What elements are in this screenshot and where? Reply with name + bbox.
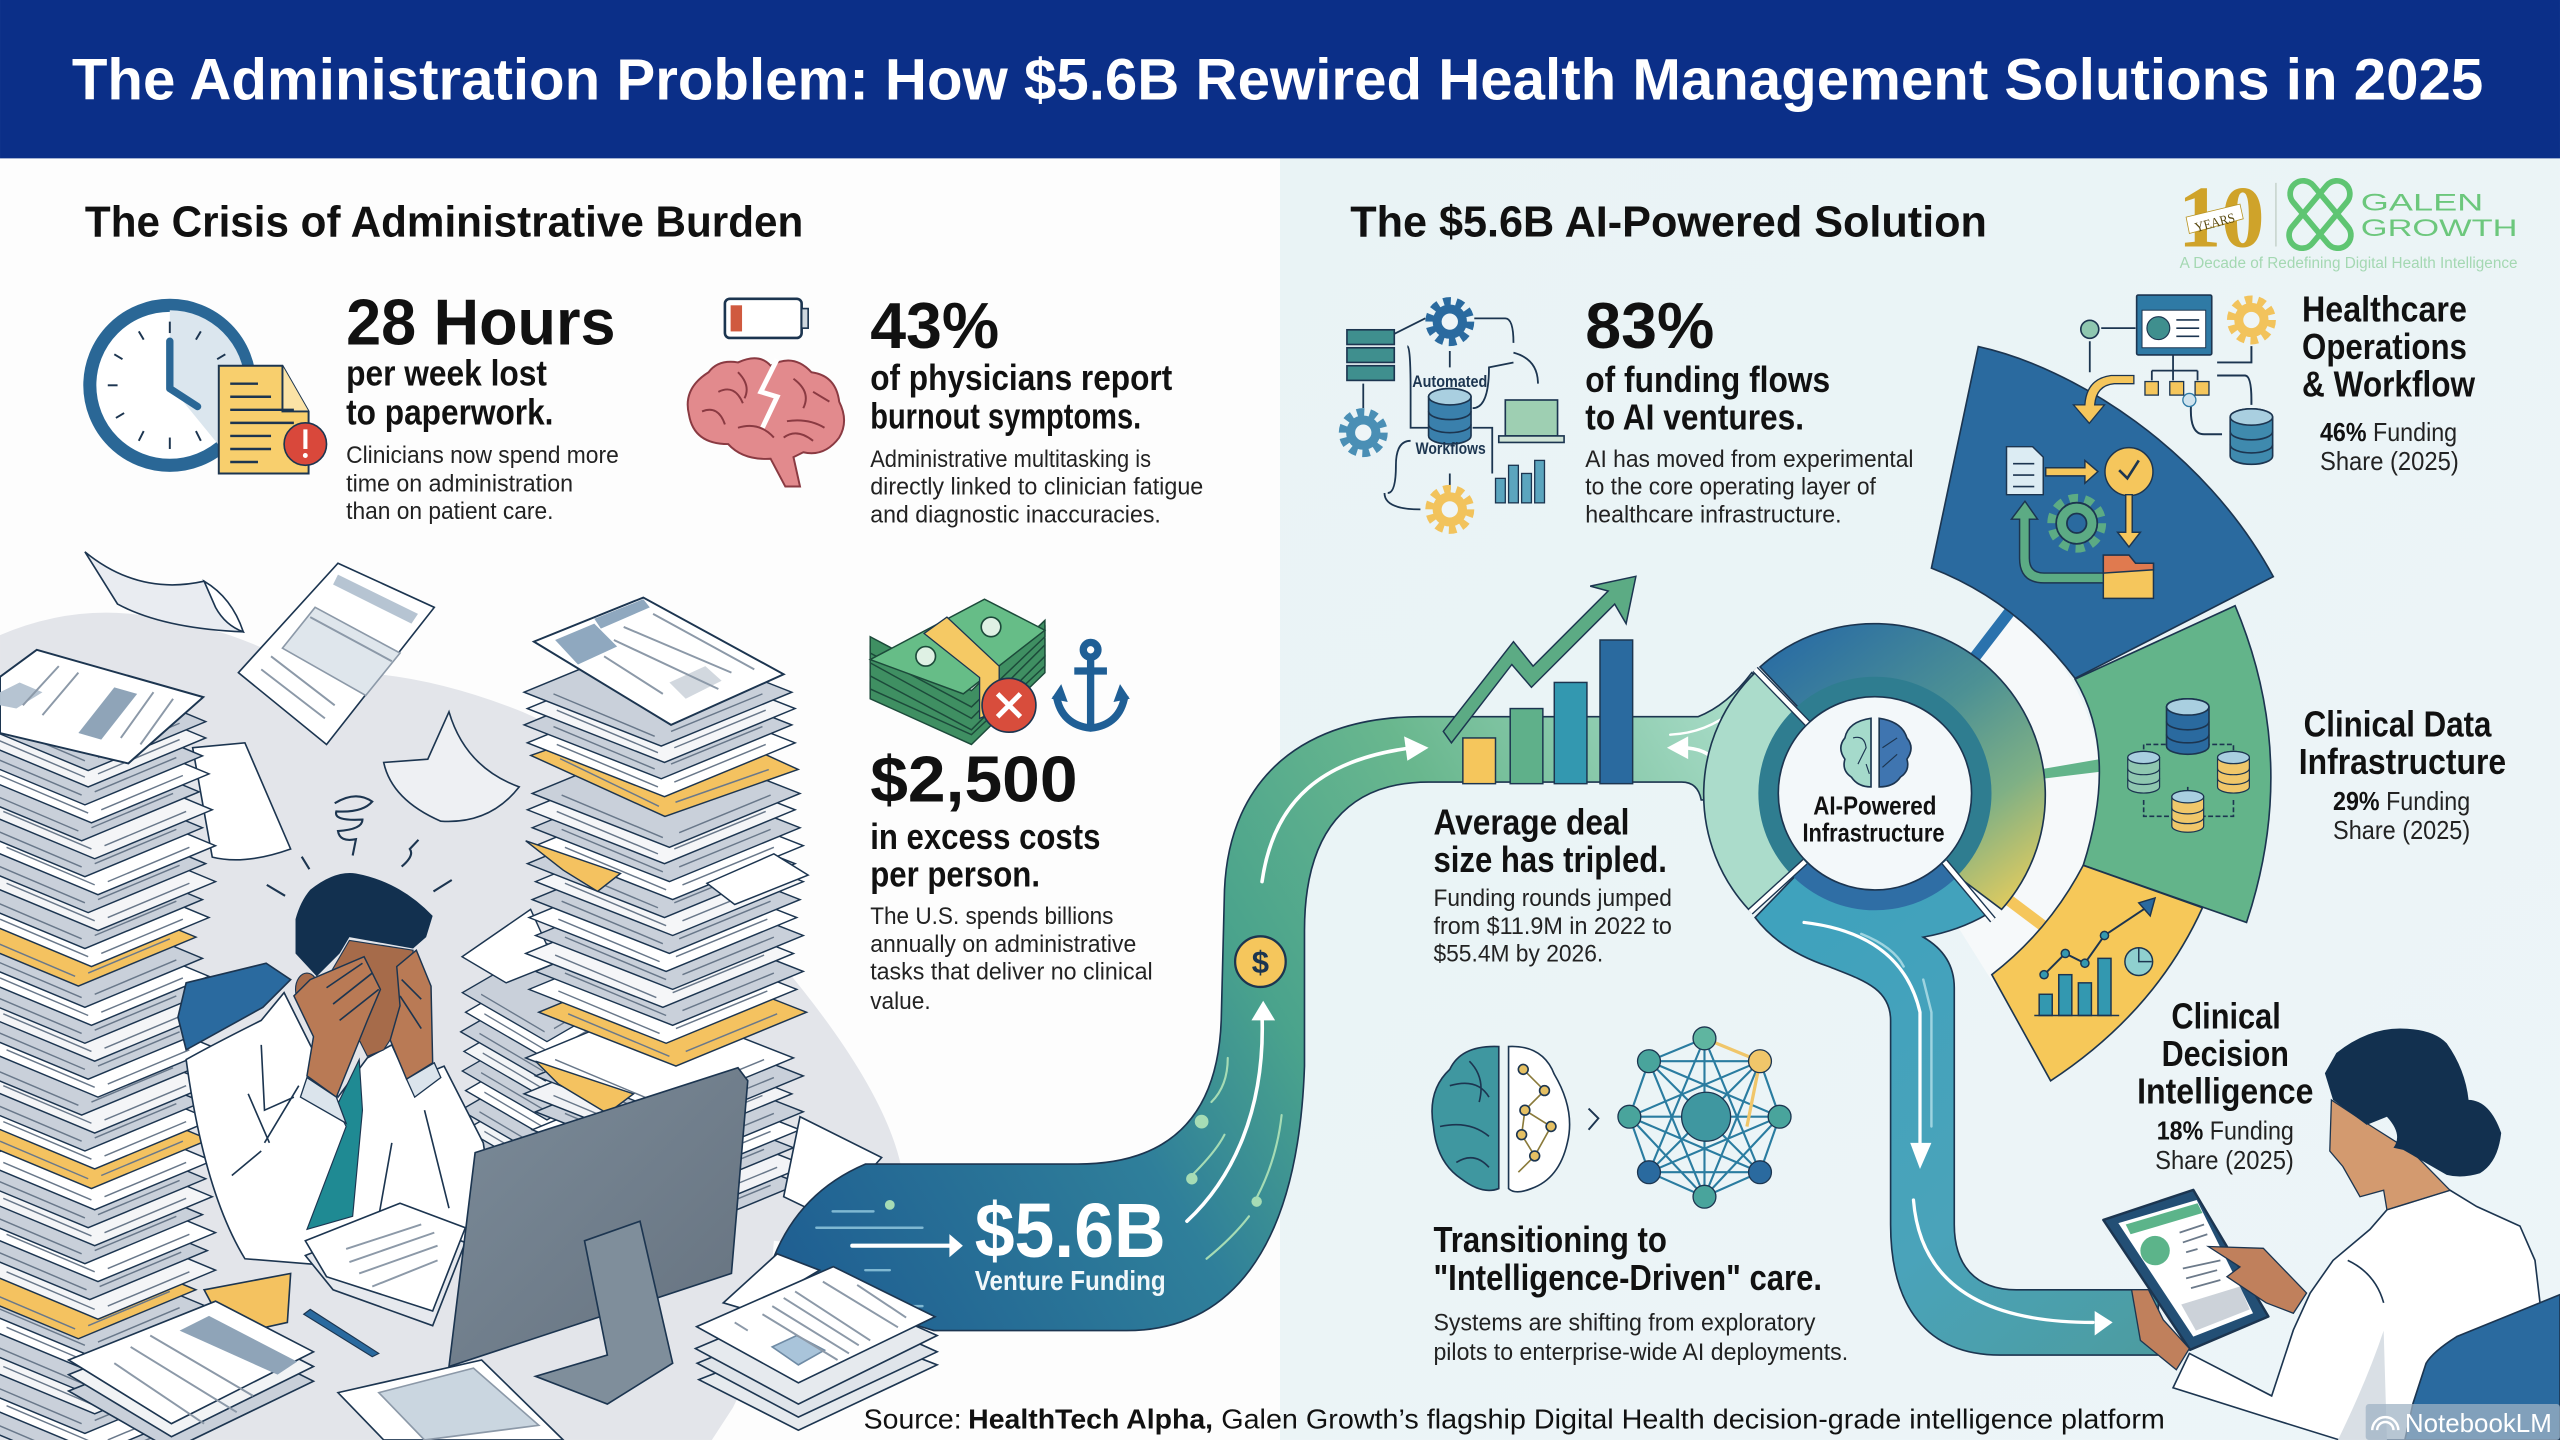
wedge: clinical decision intelligence <box>1992 865 2202 1081</box>
text: clinical decision intelligence: 18% Funding <box>2157 1116 2294 1146</box>
desk papers: front <box>69 1273 313 1450</box>
wedge: healthcare operations <box>1931 347 2273 678</box>
stat: $2,500: $2,500 <box>870 744 1078 816</box>
inner band <box>1768 687 1982 900</box>
icon: workflow automation: Automated <box>1412 373 1487 391</box>
neck and face <box>2330 1100 2450 1210</box>
cuffs <box>300 1063 441 1123</box>
icon: analytics chart <box>2034 898 2155 1015</box>
icon: green cross <box>2284 175 2356 254</box>
NotebookLM badge <box>2366 1404 2560 1440</box>
stat: $2,500: in excess costs <box>870 816 1100 857</box>
funding label: $5.6B <box>975 1189 1166 1274</box>
stat: $2,500: per person. <box>870 854 1040 895</box>
back stack <box>461 909 636 1277</box>
growth arrow <box>1443 576 1636 743</box>
source line: Galen Growth’s flagship Digital Health decision-grade intelligence platform <box>1221 1404 2165 1435</box>
text: average deal size: Funding rounds jumped <box>1433 885 1672 912</box>
text: clinical data infrastructure <box>2299 703 2506 845</box>
stat: 43%: Administrative multitasking is <box>870 446 1151 473</box>
wordmark <box>2361 191 2518 242</box>
icon: workflow automation: Workflows <box>1416 440 1486 458</box>
teal output channel <box>1755 865 2158 1355</box>
stat: 28 hours: 28 Hours <box>346 286 616 358</box>
stat: 28 hours: Clinicians now spend more <box>346 442 619 469</box>
stat: 83%: to AI ventures. <box>1585 396 1804 437</box>
grey backdrop <box>0 613 903 1440</box>
connector stems <box>1959 607 2109 939</box>
hub separators <box>1750 669 1993 920</box>
left heading: The Crisis of Administrative Burden <box>85 199 803 247</box>
centre disc <box>1778 697 1972 890</box>
network <box>1618 1027 1791 1208</box>
wordmark: GROWTH <box>2361 216 2518 242</box>
desk papers: left <box>305 1203 465 1326</box>
hub ring: AI-powered infrastructure <box>1704 624 2045 920</box>
coat fold <box>2348 1260 2384 1303</box>
text: clinical decision intelligence: Decision <box>2162 1033 2289 1074</box>
icon: AI brain <box>1841 718 1911 787</box>
text: average deal size: size has tripled. <box>1433 839 1667 880</box>
coat <box>2173 1190 2540 1440</box>
stat: 43%: burnout symptoms. <box>870 396 1141 437</box>
text: clinical data infrastructure: Infrastructure <box>2299 741 2506 782</box>
chair <box>178 963 291 1050</box>
coat folds <box>232 1045 449 1216</box>
hands <box>294 950 433 1097</box>
stat: 28 hours: per week lost <box>346 352 547 393</box>
clinician <box>69 873 882 1450</box>
coin <box>1235 936 1286 987</box>
text: intelligence-driven care: pilots to enterprise-wide AI deployments. <box>1433 1339 1848 1366</box>
stress spiral <box>267 796 452 896</box>
logo: Galen Growth <box>2178 169 2518 272</box>
stat: 43%: of physicians report <box>870 357 1172 398</box>
stat: 43% <box>870 290 1203 528</box>
source line: HealthTech Alpha, <box>968 1404 1213 1435</box>
stat: $2,500: tasks that deliver no clinical <box>870 959 1153 986</box>
stat: 43%: 43% <box>870 290 999 362</box>
stat: 28 hours: to paperwork. <box>346 391 553 432</box>
text: clinical data infrastructure: Clinical Data <box>2304 703 2492 744</box>
stat: $2,500: value. <box>870 988 931 1015</box>
illustration: clinician with tablet <box>2103 1029 2560 1440</box>
10 years mark: YEARS <box>2193 211 2237 236</box>
tie <box>307 1060 362 1229</box>
text: average deal size: Average deal <box>1433 801 1629 842</box>
title banner <box>0 0 2560 158</box>
icon: low battery and cracked brain <box>688 299 844 487</box>
hair <box>2325 1029 2501 1176</box>
text: average deal size: $55.4M by 2026. <box>1433 941 1603 968</box>
white channel between hub and wedges <box>1874 614 2101 986</box>
flow arrows <box>816 710 1742 1306</box>
text: clinical decision intelligence: Intelligence <box>2137 1071 2313 1112</box>
pale inflow arc <box>1704 673 1807 909</box>
funding flow ribbon <box>774 673 1812 1331</box>
monitor <box>449 1068 748 1404</box>
stat: 83%: to the core operating layer of <box>1585 474 1876 501</box>
hub label: Infrastructure <box>1802 818 1944 848</box>
stat: 28 hours <box>346 286 619 525</box>
stat: 83%: 83% <box>1585 290 1714 362</box>
text: intelligence-driven care: Systems are shifting from exploratory <box>1433 1310 1816 1337</box>
text: clinical decision intelligence <box>2137 996 2313 1175</box>
text: clinical data infrastructure: Share (2025) <box>2333 815 2470 845</box>
text: intelligence-driven care: "Intelligence-Driven" care. <box>1433 1257 1822 1298</box>
left stack top sheet <box>0 650 203 763</box>
text: clinical decision intelligence: Clinical <box>2171 996 2281 1037</box>
right heading: The $5.6B AI-Powered Solution <box>1350 199 1987 247</box>
stat: 28 hours: time on administration <box>346 470 573 497</box>
text: intelligence-driven care: Transitioning to <box>1433 1219 1667 1260</box>
text: clinical data infrastructure: 29% Funding <box>2333 786 2470 816</box>
desk papers: centre <box>338 1360 563 1440</box>
icon: brain to network <box>1432 1027 1791 1208</box>
chair <box>2405 1295 2560 1440</box>
wordmark: GALEN <box>2361 191 2483 217</box>
left paper stack <box>0 673 216 1455</box>
stat: $2,500 <box>870 744 1153 1015</box>
ear <box>296 973 318 1006</box>
desk papers: right stack <box>696 1254 937 1430</box>
stat: 43%: and diagnostic inaccuracies. <box>870 501 1161 528</box>
icon: clock and document <box>90 305 327 473</box>
wedge: clinical data infrastructure <box>2075 606 2271 922</box>
inner band bottom arc <box>1801 870 1949 900</box>
sheet behind monitor <box>784 1117 882 1218</box>
stat: 83%: of funding flows <box>1585 359 1830 400</box>
icon: workflow loop <box>2007 447 2153 598</box>
main gradient arc <box>1760 624 2045 909</box>
icon: workflow automation <box>1343 301 1564 530</box>
text: average deal size <box>1433 801 1672 968</box>
floating paper: curled <box>85 552 243 632</box>
pen <box>304 1309 379 1357</box>
hands <box>2132 1247 2307 1370</box>
stat: 83%: AI has moved from experimental <box>1585 446 1913 473</box>
loose white sheet <box>193 743 291 860</box>
stat: $2,500: annually on administrative <box>870 931 1136 958</box>
text: healthcare operations: Operations <box>2302 326 2467 367</box>
source line: Source: <box>864 1404 962 1435</box>
right paper stack <box>524 638 808 1238</box>
NotebookLM badge: NotebookLM <box>2405 1408 2552 1438</box>
text: intelligence-driven care <box>1433 1219 1848 1366</box>
right stack top sheet <box>534 598 784 725</box>
icon: databases <box>2128 699 2249 832</box>
coin: $ <box>1252 945 1269 980</box>
stat: 83%: healthcare infrastructure. <box>1585 501 1842 528</box>
icon: money stack with red X and anchor <box>870 599 1130 744</box>
text: healthcare operations: Share (2025) <box>2320 446 2459 476</box>
text: healthcare operations <box>2302 289 2475 476</box>
10 years mark: 10 <box>2178 169 2264 267</box>
coat <box>186 993 498 1265</box>
tagline: A Decade of Redefining Digital Health Intelligence <box>2180 255 2518 272</box>
bar chart: deal size growth <box>1443 576 1636 784</box>
hair <box>296 873 433 976</box>
text: clinical decision intelligence: Share (2025) <box>2155 1145 2294 1175</box>
brain <box>1432 1046 1570 1192</box>
channel arrows <box>1804 922 2093 1322</box>
crumpled paper <box>384 712 519 821</box>
coat shadow <box>2338 1331 2387 1440</box>
tablet <box>2103 1190 2268 1350</box>
text: healthcare operations: & Workflow <box>2302 364 2475 405</box>
icon: operations dashboard above wedge <box>2073 295 2273 464</box>
hub label: AI-Powered <box>1813 791 1936 821</box>
text: healthcare operations: 46% Funding <box>2320 417 2457 447</box>
text: healthcare operations: Healthcare <box>2302 289 2467 330</box>
flow dots <box>885 1115 1262 1210</box>
title banner: The Administration Problem: How $5.6B Rewired Health Management Solutions in 2025 <box>72 48 2483 113</box>
stat: 28 hours: than on patient care. <box>346 498 553 525</box>
bottom white strip <box>0 1440 2560 1455</box>
stat: $2,500: The U.S. spends billions <box>870 903 1113 930</box>
funding flow ribbon: Venture Funding <box>975 1265 1166 1296</box>
stat: 83% <box>1585 290 1913 528</box>
face <box>327 940 413 1056</box>
floating paper: form <box>238 563 434 744</box>
text: average deal size: from $11.9M in 2022 to <box>1433 913 1672 940</box>
chevron <box>1589 1109 1598 1130</box>
hub label <box>1802 791 1944 848</box>
stat: 43%: directly linked to clinician fatigue <box>870 474 1203 501</box>
